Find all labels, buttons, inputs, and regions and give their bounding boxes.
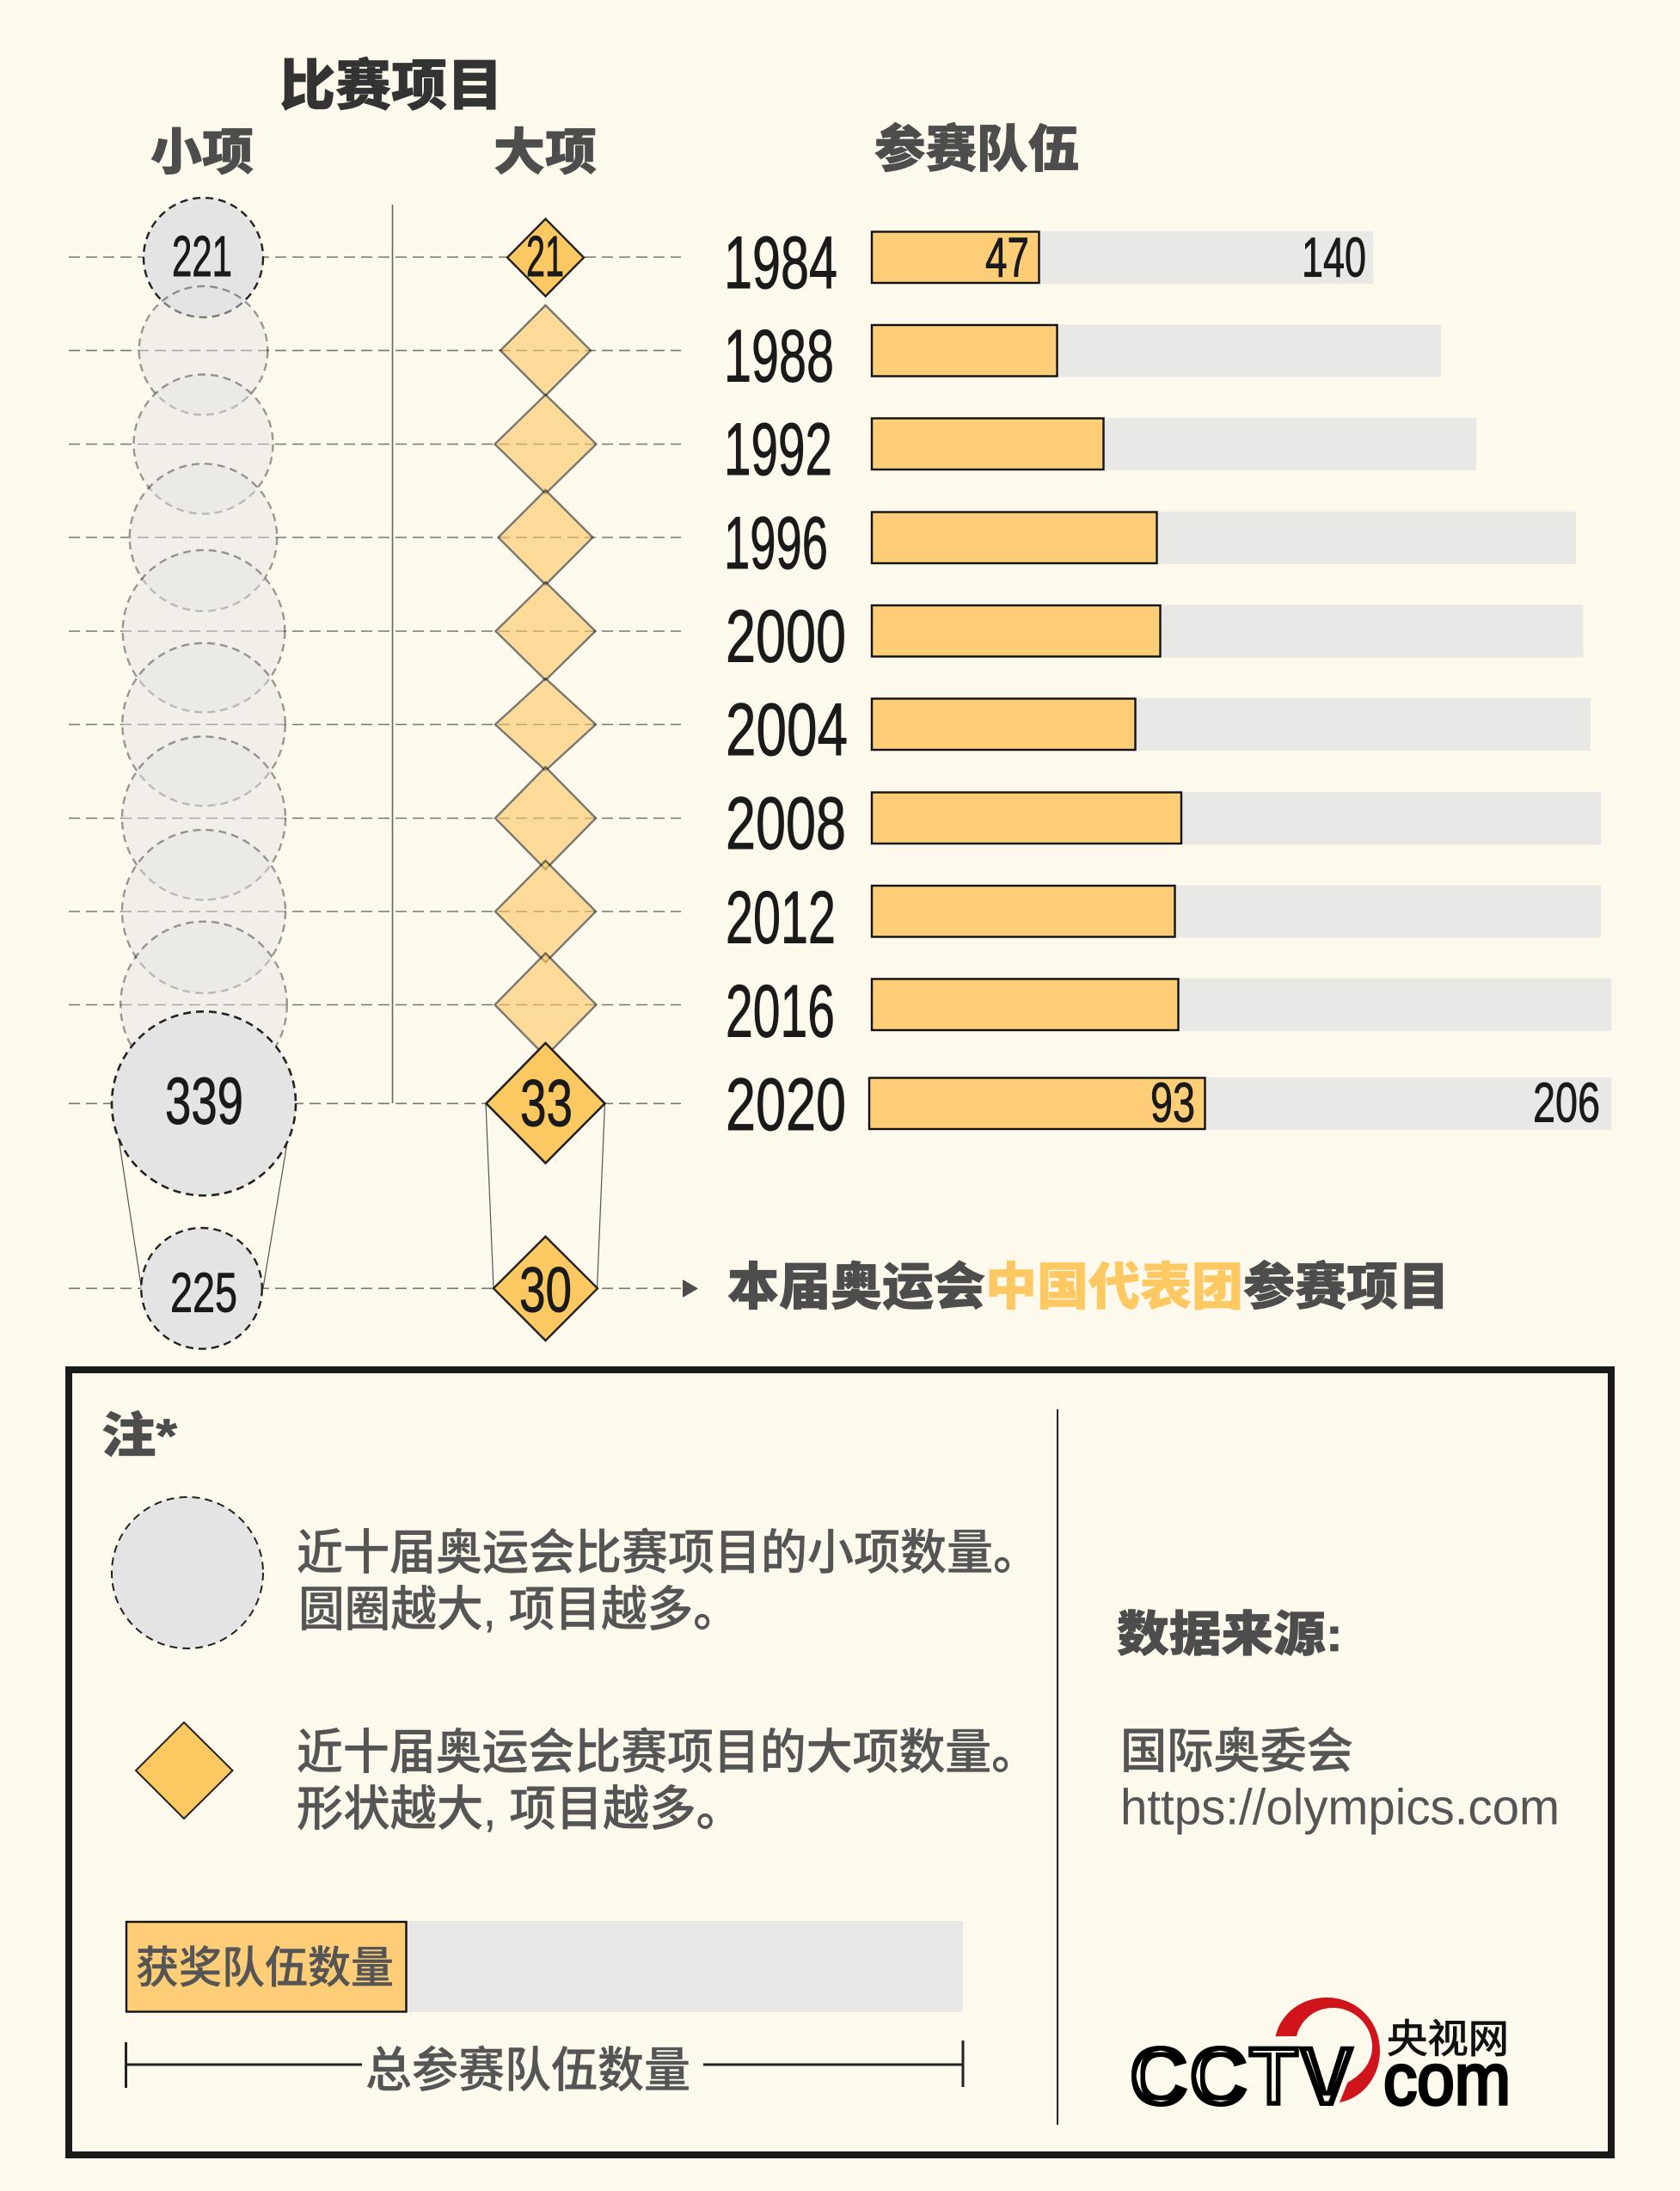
arrow <box>683 1280 698 1298</box>
heading: 小项: 小项 <box>150 125 254 181</box>
logo: CCTV 央视网: com <box>1383 2039 1511 2120</box>
legend bracket: 总参赛队伍数量: 总参赛队伍数量 <box>365 2043 690 2097</box>
circle and diamond value labels: 33 <box>520 1066 573 1140</box>
logo: CCTV 央视网: CCTV <box>1129 2029 1354 2123</box>
legend text: circle: 圆圈越大, 项目越多。 <box>298 1582 739 1636</box>
text: source: https://olympics.com <box>1120 1780 1560 1836</box>
legend icon: diamond <box>136 1722 232 1819</box>
logo: CCTV 央视网 <box>1129 1998 1511 2123</box>
legend text: circle <box>297 1525 1039 1636</box>
legend sample bar: 获奖队伍数量 <box>136 1943 394 1992</box>
year labels: 2008 <box>726 782 846 865</box>
legend icon: circle <box>112 1497 263 1648</box>
circle and diamond value labels: 30 <box>519 1254 572 1326</box>
circle and diamond value labels: 339 <box>165 1065 243 1138</box>
year labels: 2020 <box>726 1064 846 1146</box>
legend text: diamond: 形状越大, 项目越多。 <box>297 1782 743 1836</box>
heading: 数据来源: 数据来源: <box>1117 1607 1343 1661</box>
year labels: 2012 <box>726 876 836 959</box>
panel: legend box <box>69 1370 1611 2155</box>
diamond column: 大项 counts <box>487 218 605 1341</box>
circle and diamond value labels <box>165 224 573 1326</box>
bar chart: 参赛队伍 totals and medal teams: 93 <box>1150 1071 1195 1133</box>
year labels: 1984 <box>724 222 837 304</box>
legend text: diamond: 近十届奥运会比赛项目的大项数量。 <box>297 1725 1038 1779</box>
bar chart: 参赛队伍 totals and medal teams: 47 <box>985 225 1029 289</box>
bar chart: 参赛队伍 totals and medal teams: 206 <box>1533 1071 1600 1133</box>
text: source <box>1120 1724 1560 1836</box>
bar chart: 参赛队伍 totals and medal teams <box>868 225 1611 1133</box>
year labels: 1996 <box>724 502 828 585</box>
year labels: 1992 <box>724 408 832 491</box>
year labels <box>724 222 848 1146</box>
circle and diamond value labels: 21 <box>526 224 564 289</box>
bar chart: 参赛队伍 totals and medal teams: 140 <box>1302 225 1366 289</box>
circle and diamond value labels: 225 <box>170 1261 237 1324</box>
text: source: 国际奥委会 <box>1120 1724 1353 1778</box>
title: 比赛项目: 比赛项目 <box>279 55 503 117</box>
callout: 本届奥运会中国代表团参赛项目: 本届奥运会中国代表团参赛项目 <box>727 1259 1450 1316</box>
heading: 注*: 注* <box>101 1408 177 1463</box>
year labels: 1988 <box>724 316 834 398</box>
year labels: 2016 <box>726 970 835 1053</box>
year labels: 2000 <box>726 596 846 678</box>
heading: 大项: 大项 <box>494 125 597 181</box>
circle column: 小项 counts <box>112 198 296 1349</box>
logo: CCTV 央视网: 央视网 <box>1387 2016 1509 2061</box>
legend sample bar <box>126 1921 963 2012</box>
legend text: diamond <box>297 1725 1038 1836</box>
legend text: circle: 近十届奥运会比赛项目的小项数量。 <box>297 1525 1039 1580</box>
circle and diamond value labels: 221 <box>172 224 232 289</box>
year labels: 2004 <box>726 689 848 771</box>
heading: 参赛队伍: 参赛队伍 <box>874 121 1079 178</box>
